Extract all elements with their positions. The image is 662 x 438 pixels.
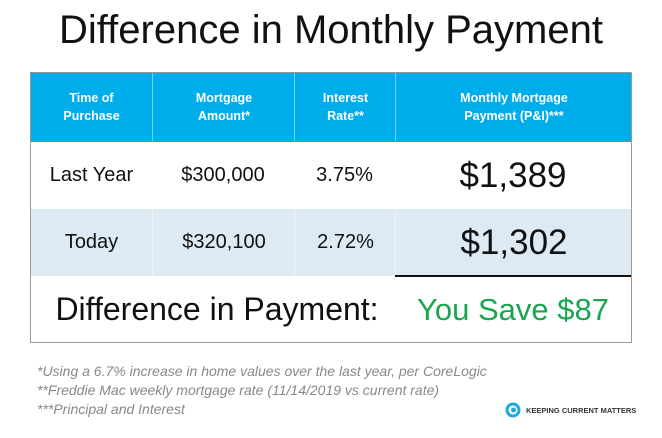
header row: Monthly Mortgage	[460, 91, 568, 105]
header row: Purchase	[63, 109, 120, 123]
row: last year: $300,000	[181, 164, 265, 186]
header row: Interest	[323, 91, 368, 105]
row: last year: Last Year	[50, 164, 133, 186]
footnotes: **Freddie Mac weekly mortgage rate (11/14/2019 vs current rate)	[37, 382, 439, 398]
footnotes: *Using a 6.7% increase in home values over the last year, per CoreLogic	[37, 363, 487, 379]
row: today: Today	[65, 231, 118, 253]
header row: Rate**	[327, 109, 364, 123]
logo	[506, 402, 636, 418]
header row: Mortgage	[196, 91, 252, 105]
row: last year: 3.75%	[316, 164, 373, 186]
row: today: $320,100	[182, 231, 266, 253]
footnotes	[37, 363, 487, 417]
row: today	[31, 209, 631, 276]
table	[30, 72, 632, 343]
difference row	[55, 291, 609, 327]
row: last year	[31, 141, 631, 210]
row: today: $1,302	[460, 222, 568, 262]
difference row: You Save $87	[417, 292, 609, 326]
difference row: Difference in Payment:	[55, 291, 379, 327]
header row: Time of	[69, 91, 114, 105]
logo: KEEPING CURRENT MATTERS	[526, 406, 636, 414]
header row	[31, 73, 631, 141]
header row: Payment (P&I)***	[464, 109, 564, 123]
row: last year: $1,389	[459, 156, 567, 194]
row: today: 2.72%	[317, 231, 374, 253]
footnotes: ***Principal and Interest	[37, 401, 185, 417]
title: Difference in Monthly Payment	[59, 8, 603, 52]
header row: Amount*	[198, 109, 250, 123]
icon: logo swirl	[506, 402, 520, 418]
